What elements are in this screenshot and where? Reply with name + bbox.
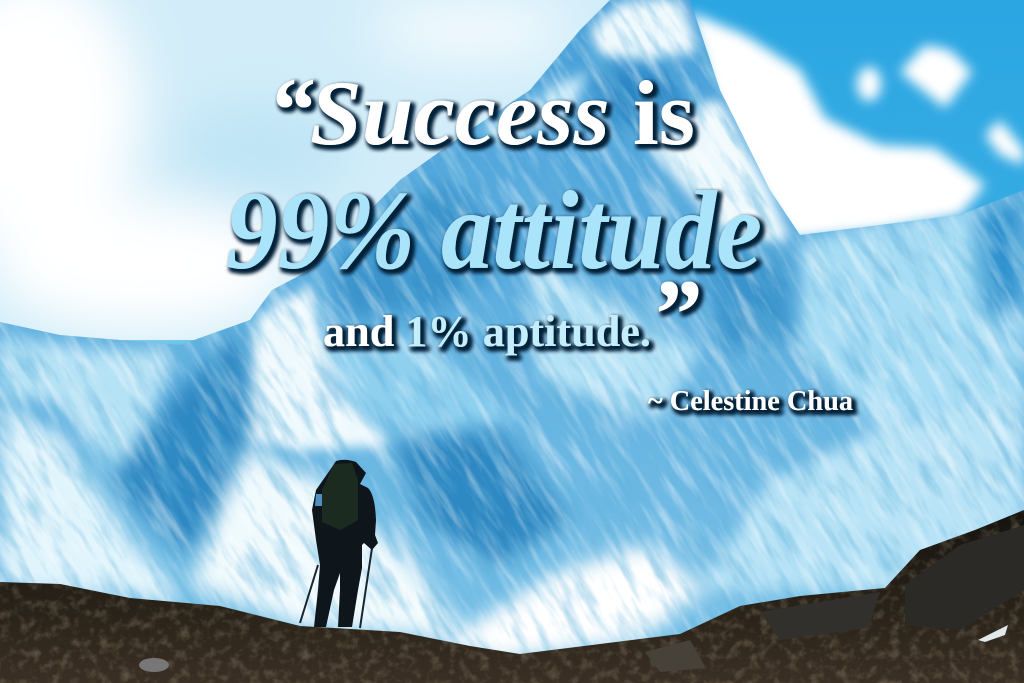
foreground ridge (0, 505, 1024, 683)
line: Success is: Success is (310, 62, 695, 164)
opening quote: “ (268, 59, 314, 161)
hiker silhouette (300, 460, 378, 628)
small clouds (857, 45, 1024, 165)
dark faces (110, 70, 1024, 565)
clouds (0, 0, 1024, 340)
attribution: ~ Celestine Chua (648, 385, 853, 417)
pale snowfields (0, 195, 1024, 590)
trekking poles (300, 565, 318, 623)
peak snow (245, 0, 790, 450)
line: 99% attitude: 99% attitude (226, 169, 762, 293)
backpack (322, 463, 358, 530)
lower snow (0, 405, 705, 660)
closing quote: ” (650, 259, 700, 370)
line: and 1% aptitude: and 1% aptitude. (323, 307, 651, 356)
quote text (226, 59, 853, 417)
body (312, 460, 378, 627)
